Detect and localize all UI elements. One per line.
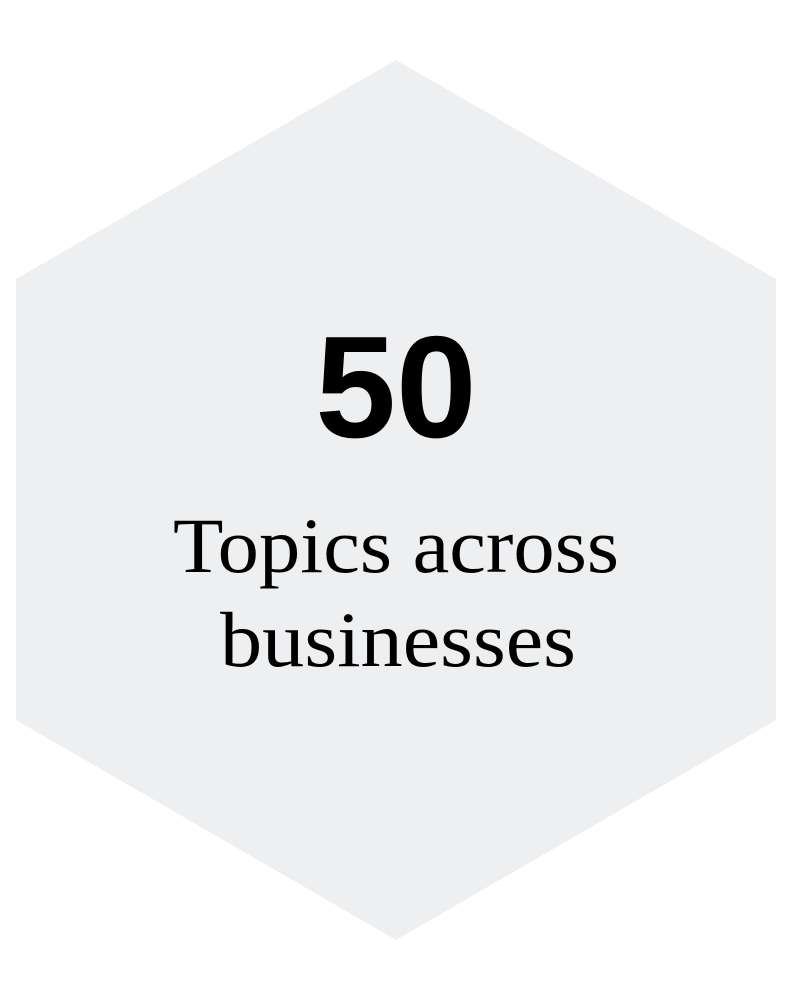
text block: description <box>173 502 619 683</box>
text block: description: businesses <box>220 596 576 683</box>
text block: description: Topics across <box>173 502 619 589</box>
stat number: 50: 50 <box>315 306 477 468</box>
